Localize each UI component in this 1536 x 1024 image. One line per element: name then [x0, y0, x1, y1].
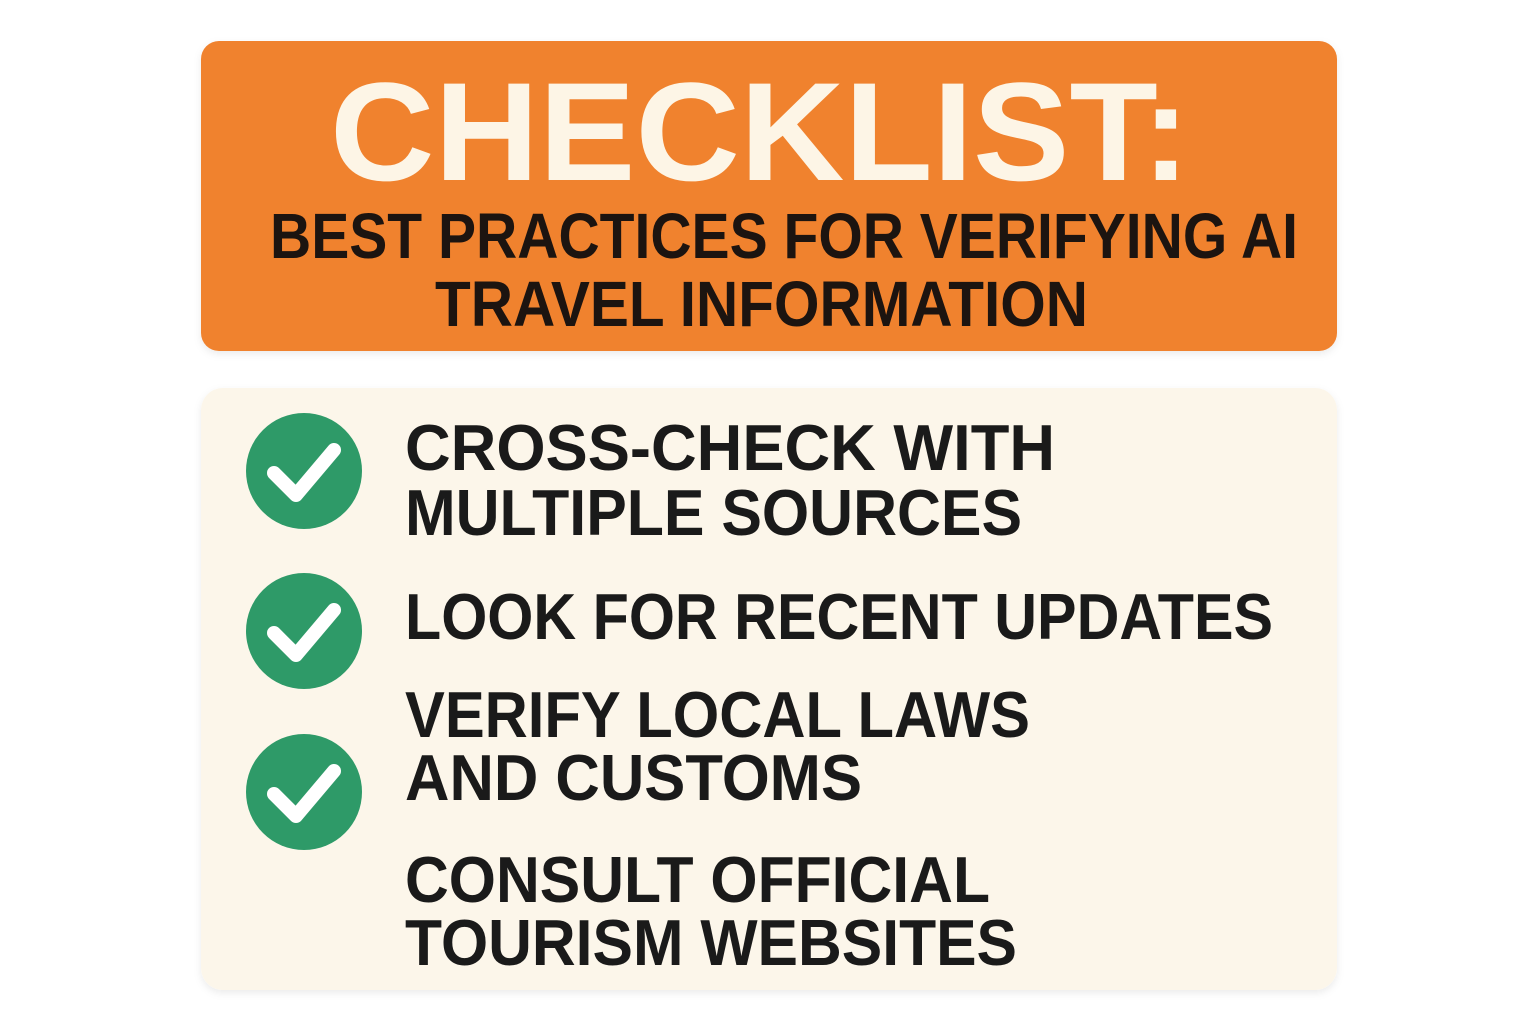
icon: check 2 [246, 573, 362, 689]
item 2 text: LOOK FOR RECENT UPDATES [405, 580, 1273, 653]
item 3 text: VERIFY LOCAL LAWS [405, 678, 1030, 751]
subtitle: TRAVEL INFORMATION [435, 268, 1088, 340]
item 4 text [405, 843, 1017, 979]
item 3 text: AND CUSTOMS [405, 741, 862, 814]
subtitle [270, 200, 1298, 340]
icon: check 1 [246, 413, 362, 529]
item 1 text: MULTIPLE SOURCES [405, 476, 1022, 549]
checklist panel [201, 388, 1337, 990]
subtitle: BEST PRACTICES FOR VERIFYING AI [270, 200, 1298, 272]
item 4 text: CONSULT OFFICIAL [405, 843, 990, 916]
item 4 text: TOURISM WEBSITES [405, 906, 1017, 979]
header banner [201, 41, 1337, 351]
item 1 text [405, 411, 1055, 549]
item 1 text: CROSS-CHECK WITH [405, 411, 1055, 484]
icon: check 3 [246, 734, 362, 850]
title: CHECKLIST: [330, 53, 1190, 210]
item 3 text [405, 678, 1030, 814]
